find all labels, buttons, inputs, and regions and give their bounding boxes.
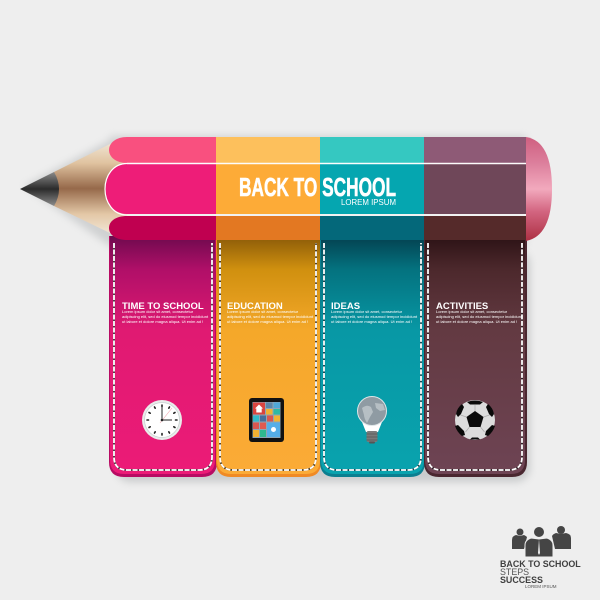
- card shadow: [116, 250, 530, 482]
- text block: activities: adipiscing elit, sed do eiusmod tempor incididunt: [436, 314, 523, 319]
- icon: light bulb globe: [358, 396, 386, 444]
- heading: activities: ACTIVITIES: [436, 301, 488, 312]
- text block: education: Lorem ipsum dolor sit amet, consectetur: [227, 309, 299, 314]
- text block: activities: Lorem ipsum dolor sit amet, consectetur: [436, 309, 508, 314]
- text block: education: ut labore et dolore magna aliqua. Ut enim ad !: [227, 319, 308, 324]
- text block: time to school: adipiscing elit, sed do eiusmod tempor incididunt: [122, 314, 209, 319]
- panel: ideas: [320, 236, 425, 477]
- heading: time to school: TIME TO SCHOOL: [122, 301, 204, 312]
- text block: ideas: ut labore et dolore magna aliqua. Ut enim ad !: [331, 319, 412, 324]
- segment: plum: [424, 137, 526, 240]
- text block: activities: ut labore et dolore magna aliqua. Ut enim ad !: [436, 319, 517, 324]
- panel: activities: [424, 236, 527, 477]
- logo: back to school steps success: [500, 526, 581, 589]
- subtitle: LOREM IPSUM: [341, 198, 396, 207]
- logo: back to school steps success: LOREM IPSUM: [525, 584, 557, 589]
- graphite tip: [20, 172, 59, 206]
- text block: ideas: adipiscing elit, sed do eiusmod tempor incididunt: [331, 314, 418, 319]
- segment: teal: [320, 137, 424, 240]
- heading: education: EDUCATION: [227, 301, 283, 312]
- panel: education: [216, 236, 321, 477]
- icon: tablet: [249, 398, 284, 442]
- logo text: BACK TO SCHOOL: [500, 559, 581, 569]
- icon: soccer ball: [455, 400, 495, 440]
- text block: education: adipiscing elit, sed do eiusmod tempor incididunt: [227, 314, 314, 319]
- icon: clock: [142, 400, 182, 440]
- text block: time to school: ut labore et dolore magna aliqua. Ut enim ad !: [122, 319, 203, 324]
- panel: time to school: [109, 236, 217, 477]
- pencil shadow: [24, 136, 526, 246]
- text block: time to school: Lorem ipsum dolor sit amet, consectetur: [122, 309, 194, 314]
- eraser: [526, 137, 552, 241]
- segment: orange: [216, 137, 320, 240]
- text block: ideas: Lorem ipsum dolor sit amet, consectetur: [331, 309, 403, 314]
- pencil: [20, 137, 552, 241]
- logo: back to school steps success: SUCCESS: [500, 575, 543, 585]
- wood cone: [54, 143, 130, 234]
- segment: pink: [105, 137, 216, 240]
- heading: ideas: IDEAS: [331, 301, 360, 312]
- icon: three people: [512, 526, 571, 557]
- title: BACK TO SCHOOL: [239, 172, 396, 202]
- logo: back to school steps success: STEPS: [500, 567, 529, 577]
